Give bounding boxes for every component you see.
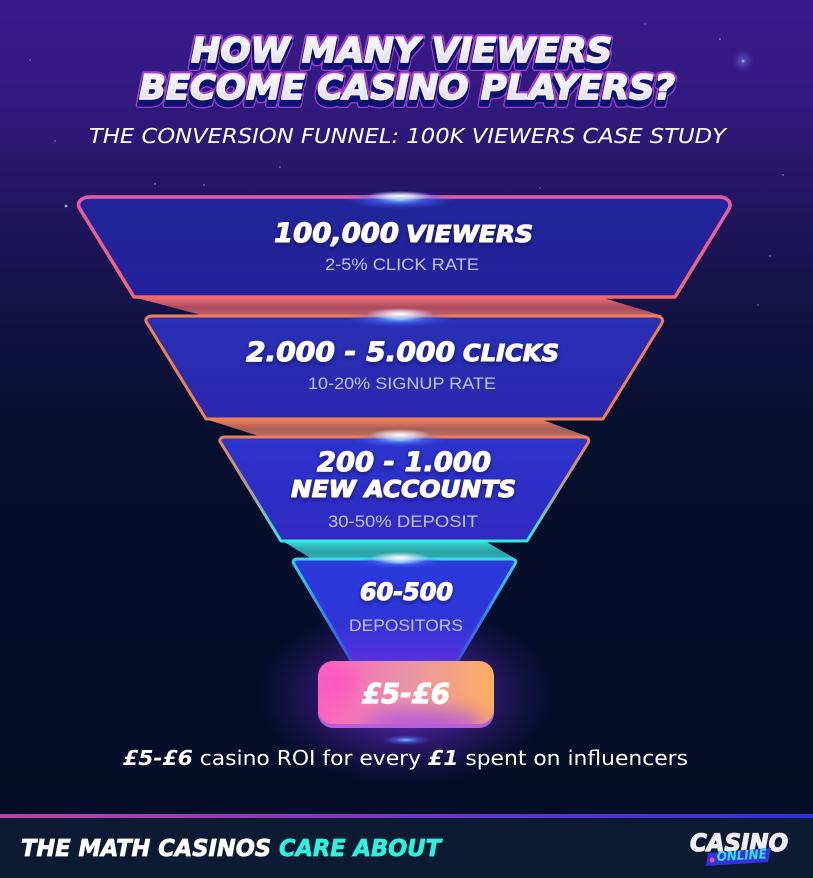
title: BECOME CASINO PLAYERS? xyxy=(138,74,674,114)
label: clicks count: CLICKS xyxy=(463,341,559,367)
subtitle: THE CONVERSION FUNNEL: 100K VIEWERS CASE STUDY xyxy=(89,124,728,148)
panel: viewers xyxy=(79,191,730,297)
caption: £5-£6 casino ROI for every £1 spent on influencers xyxy=(123,746,688,770)
footer tagline: THE MATH CASINOS CARE ABOUT xyxy=(21,836,443,862)
label: 100,000 viewers: VIEWERS xyxy=(406,222,533,248)
title: HOW MANY VIEWERS xyxy=(191,31,612,71)
label: depositors count: 60-500 xyxy=(360,578,453,606)
label: depositors: DEPOSITORS xyxy=(349,616,463,635)
title: HOW MANY VIEWERS xyxy=(190,37,611,77)
title: HOW MANY VIEWERS xyxy=(191,31,612,71)
label: clicks count xyxy=(246,337,559,368)
logo: ONLINE xyxy=(716,847,767,865)
panel: new accounts xyxy=(220,429,589,541)
label: ROI range: £5-£6 xyxy=(362,677,450,710)
flare xyxy=(350,429,450,447)
label: 100,000 viewers: 100,000 xyxy=(274,218,399,249)
label: new accounts count xyxy=(291,447,516,503)
logo: CASINO xyxy=(690,829,788,857)
label: new accounts count: 200 - 1.000 xyxy=(317,447,491,478)
connector 2 xyxy=(205,419,589,437)
title: HOW MANY VIEWERS xyxy=(191,34,612,74)
title: BECOME CASINO PLAYERS? xyxy=(138,74,674,114)
connector 3 xyxy=(281,540,516,559)
label: new accounts count: NEW ACCOUNTS xyxy=(291,477,516,503)
connector 1 xyxy=(133,297,663,316)
label: clicks count: 2.000 - 5.000 xyxy=(246,337,455,368)
starfield xyxy=(29,23,784,306)
footer xyxy=(0,814,813,878)
title: HOW MANY VIEWERS xyxy=(190,37,611,77)
title xyxy=(138,31,675,114)
flare xyxy=(355,552,445,568)
flare xyxy=(345,308,455,327)
result button xyxy=(318,661,494,728)
title: BECOME CASINO PLAYERS? xyxy=(139,68,675,108)
panel: clicks xyxy=(146,308,663,419)
label: click rate: 2-5% CLICK RATE xyxy=(325,255,479,274)
label: deposit rate: 30-50% DEPOSIT xyxy=(328,512,478,531)
title: BECOME CASINO PLAYERS? xyxy=(139,68,675,108)
icon: glowing star xyxy=(731,49,755,73)
halo behind result button xyxy=(256,603,556,787)
label: signup rate: 10-20% SIGNUP RATE xyxy=(308,374,496,393)
flare xyxy=(345,191,455,209)
title: BECOME CASINO PLAYERS? xyxy=(139,71,675,111)
label: 100,000 viewers xyxy=(274,218,533,249)
panel: depositors xyxy=(293,552,516,662)
funnel xyxy=(79,191,730,787)
flare xyxy=(382,735,430,745)
